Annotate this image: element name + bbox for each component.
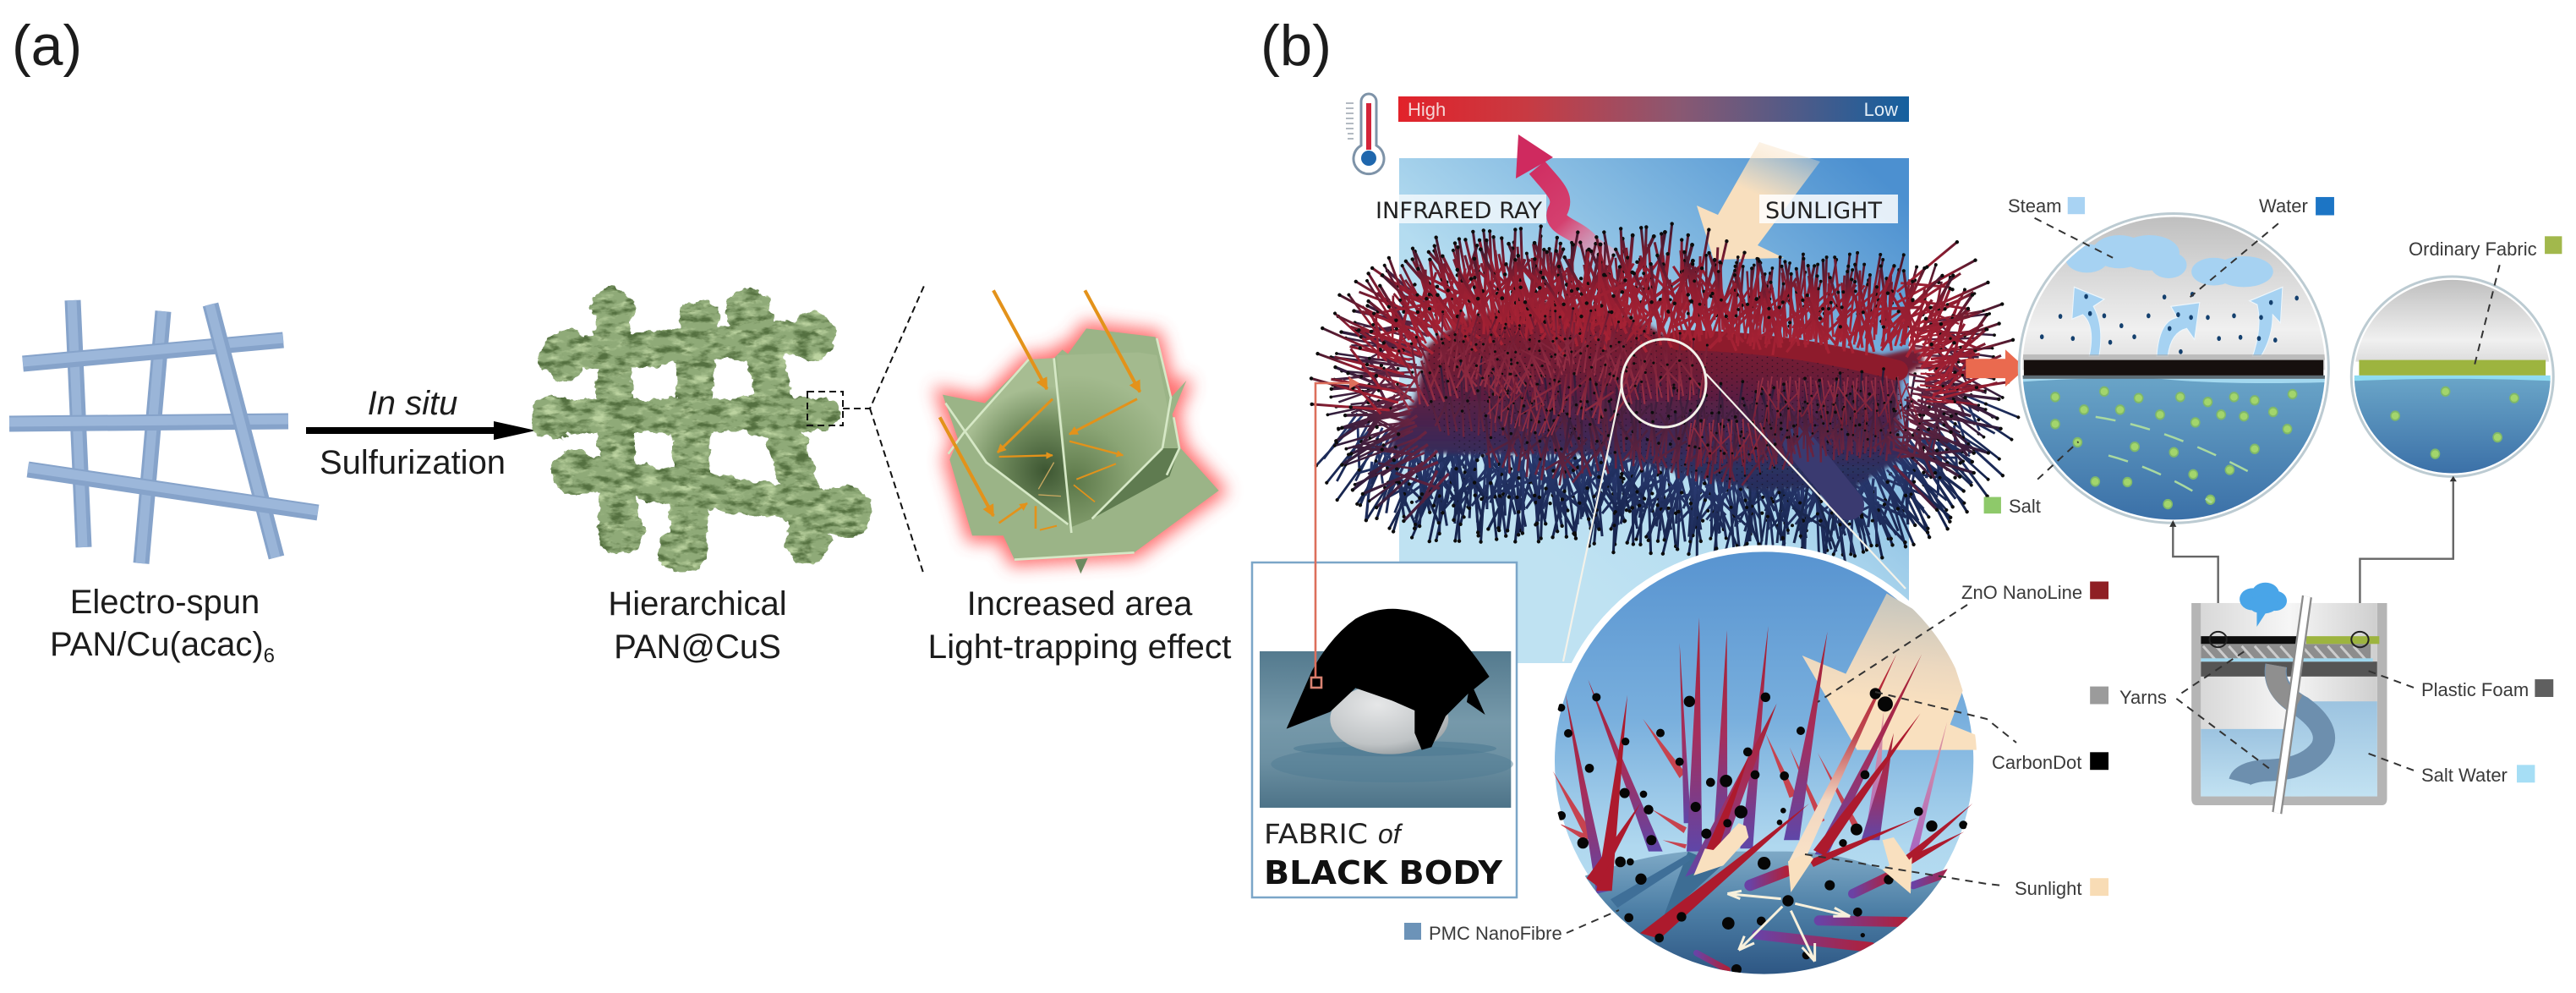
temperature scale bar: Low bbox=[1864, 99, 1898, 120]
icon: sunlight arrow bbox=[1697, 142, 1820, 260]
lower navy spikes bbox=[1305, 370, 2032, 580]
temperature scale bar bbox=[1398, 96, 1909, 122]
probe rings bbox=[2210, 632, 2369, 647]
fibre: vertical tube 2 bbox=[140, 311, 163, 563]
light rays bbox=[940, 290, 1140, 530]
connector: black body to fibre bbox=[1311, 377, 1359, 688]
panel: hierarchical PAN@CuS mesh bbox=[532, 288, 872, 574]
fibre: horizontal tube 2 bbox=[9, 420, 288, 424]
panel label: (a): (a) bbox=[12, 14, 82, 78]
dashed leaders right column bbox=[2035, 218, 2500, 771]
fibre: vertical tube 3 bbox=[210, 304, 276, 557]
label: black body: BLACK BODY bbox=[1264, 854, 1502, 892]
label: increased area: Increased area bbox=[967, 585, 1193, 623]
zoom box with dashed projection lines bbox=[807, 286, 924, 575]
beaker bbox=[2191, 583, 2387, 813]
label: ordinary fabric: Ordinary Fabric bbox=[2409, 239, 2537, 260]
fabric render image bbox=[1260, 609, 1513, 808]
red arrow into circle bbox=[1966, 349, 2026, 387]
label: water: Water bbox=[2259, 195, 2308, 217]
arrow: in situ sulfurization bbox=[306, 421, 536, 440]
label: of: of bbox=[1378, 819, 1403, 849]
back spikes bbox=[1866, 710, 1947, 852]
black fabric band bbox=[2024, 360, 2323, 376]
hatching above band bbox=[2018, 354, 2332, 360]
label: PAN/Cu(acac)6: 6 bbox=[264, 645, 275, 667]
legend: PMC NanoFibre: PMC NanoFibre bbox=[1429, 923, 1562, 944]
upper red spikes bbox=[1294, 214, 2031, 435]
panel label: (b): (b) bbox=[1261, 14, 1332, 78]
cloud bbox=[2240, 583, 2287, 627]
big sunlight arrow bbox=[1802, 594, 1978, 750]
right column: evaporation diagrams bbox=[1966, 197, 2562, 896]
fibre: horizontal tube 3 bbox=[28, 468, 318, 513]
label: plastic foam: Plastic Foam bbox=[2421, 679, 2529, 700]
label: CarbonDot: CarbonDot bbox=[1992, 752, 2081, 773]
label: sunlight legend: Sunlight bbox=[2015, 878, 2082, 899]
label: PAN@CuS: PAN@CuS bbox=[614, 628, 781, 666]
icon: thermometer bbox=[1346, 94, 1384, 174]
label: fabric: FABRIC bbox=[1264, 818, 1368, 850]
long cream-fading spike bbox=[1788, 654, 1896, 863]
ordinary fabric circle bbox=[2351, 276, 2553, 478]
icon: infrared wave arrow bbox=[1516, 134, 1611, 259]
label: electro-spun: Electro-spun bbox=[70, 584, 260, 621]
legend swatches bbox=[1984, 197, 2562, 896]
fibre: horizontal tube 1 bbox=[23, 338, 283, 364]
red spikes bbox=[1587, 695, 1972, 939]
mid spikes bbox=[1304, 262, 2020, 535]
cloud of steam bbox=[2065, 235, 2273, 287]
label: sulfurization: Sulfurization bbox=[320, 444, 506, 481]
label: PAN/Cu(acac)6: PAN/Cu(acac) bbox=[50, 626, 264, 663]
steam arrows bbox=[2072, 287, 2283, 356]
fibre body bbox=[1391, 299, 1924, 510]
evaporation circle bbox=[2018, 210, 2332, 524]
dashed leader: CarbonDot bbox=[1875, 692, 2016, 743]
panel: electro-spun mesh bbox=[9, 300, 318, 563]
magnifier circle and projection lines bbox=[1563, 339, 1906, 661]
salt dots bbox=[2051, 387, 2297, 508]
label: salt water: Salt Water bbox=[2421, 765, 2508, 786]
label: infrared ray: INFRARED RAY bbox=[1376, 198, 1543, 224]
lower tube bbox=[1798, 442, 1849, 505]
tube highlight bbox=[1678, 340, 1898, 370]
label: salt: Salt bbox=[2009, 496, 2041, 517]
label: hierarchical: Hierarchical bbox=[608, 585, 787, 623]
carbon dots bbox=[1556, 688, 1967, 974]
small sunlight arrows bbox=[1693, 823, 1912, 894]
panel: blue background bbox=[1399, 158, 1909, 663]
panel: fabric of black body bbox=[1252, 562, 1517, 897]
fibre mound bbox=[1584, 851, 1942, 974]
fibre: vertical tube 1 bbox=[72, 300, 84, 547]
low purple bars bbox=[1697, 871, 1953, 970]
temperature scale bar: High bbox=[1408, 99, 1446, 120]
panel: light-trapping flower bbox=[940, 290, 1219, 573]
label: ZnO NanoLine: ZnO NanoLine bbox=[1961, 582, 2082, 603]
small reflected white arrows bbox=[1727, 891, 1850, 962]
water dots bbox=[2040, 292, 2299, 354]
label: steam: Steam bbox=[2008, 195, 2062, 217]
big magnified circle bbox=[1551, 548, 1981, 981]
white break line bbox=[2277, 596, 2307, 813]
purple spikes bbox=[1566, 617, 1922, 894]
yarn rope bbox=[2240, 666, 2324, 782]
connectors from beaker to circles bbox=[2169, 476, 2457, 633]
label: light-trapping effect: Light-trapping effect bbox=[928, 628, 1231, 666]
chart: nanofibre with spikes bbox=[1294, 214, 2032, 580]
dashed leader: Sunlight bbox=[1805, 854, 2003, 886]
label: yarns: Yarns bbox=[2119, 687, 2167, 708]
label: in situ: In situ bbox=[368, 385, 457, 422]
dashed leader: PMC NanoFibre bbox=[1567, 910, 1619, 933]
dashed leader: ZnO NanoLine bbox=[1818, 605, 1967, 702]
label: sunlight: SUNLIGHT bbox=[1765, 198, 1883, 224]
